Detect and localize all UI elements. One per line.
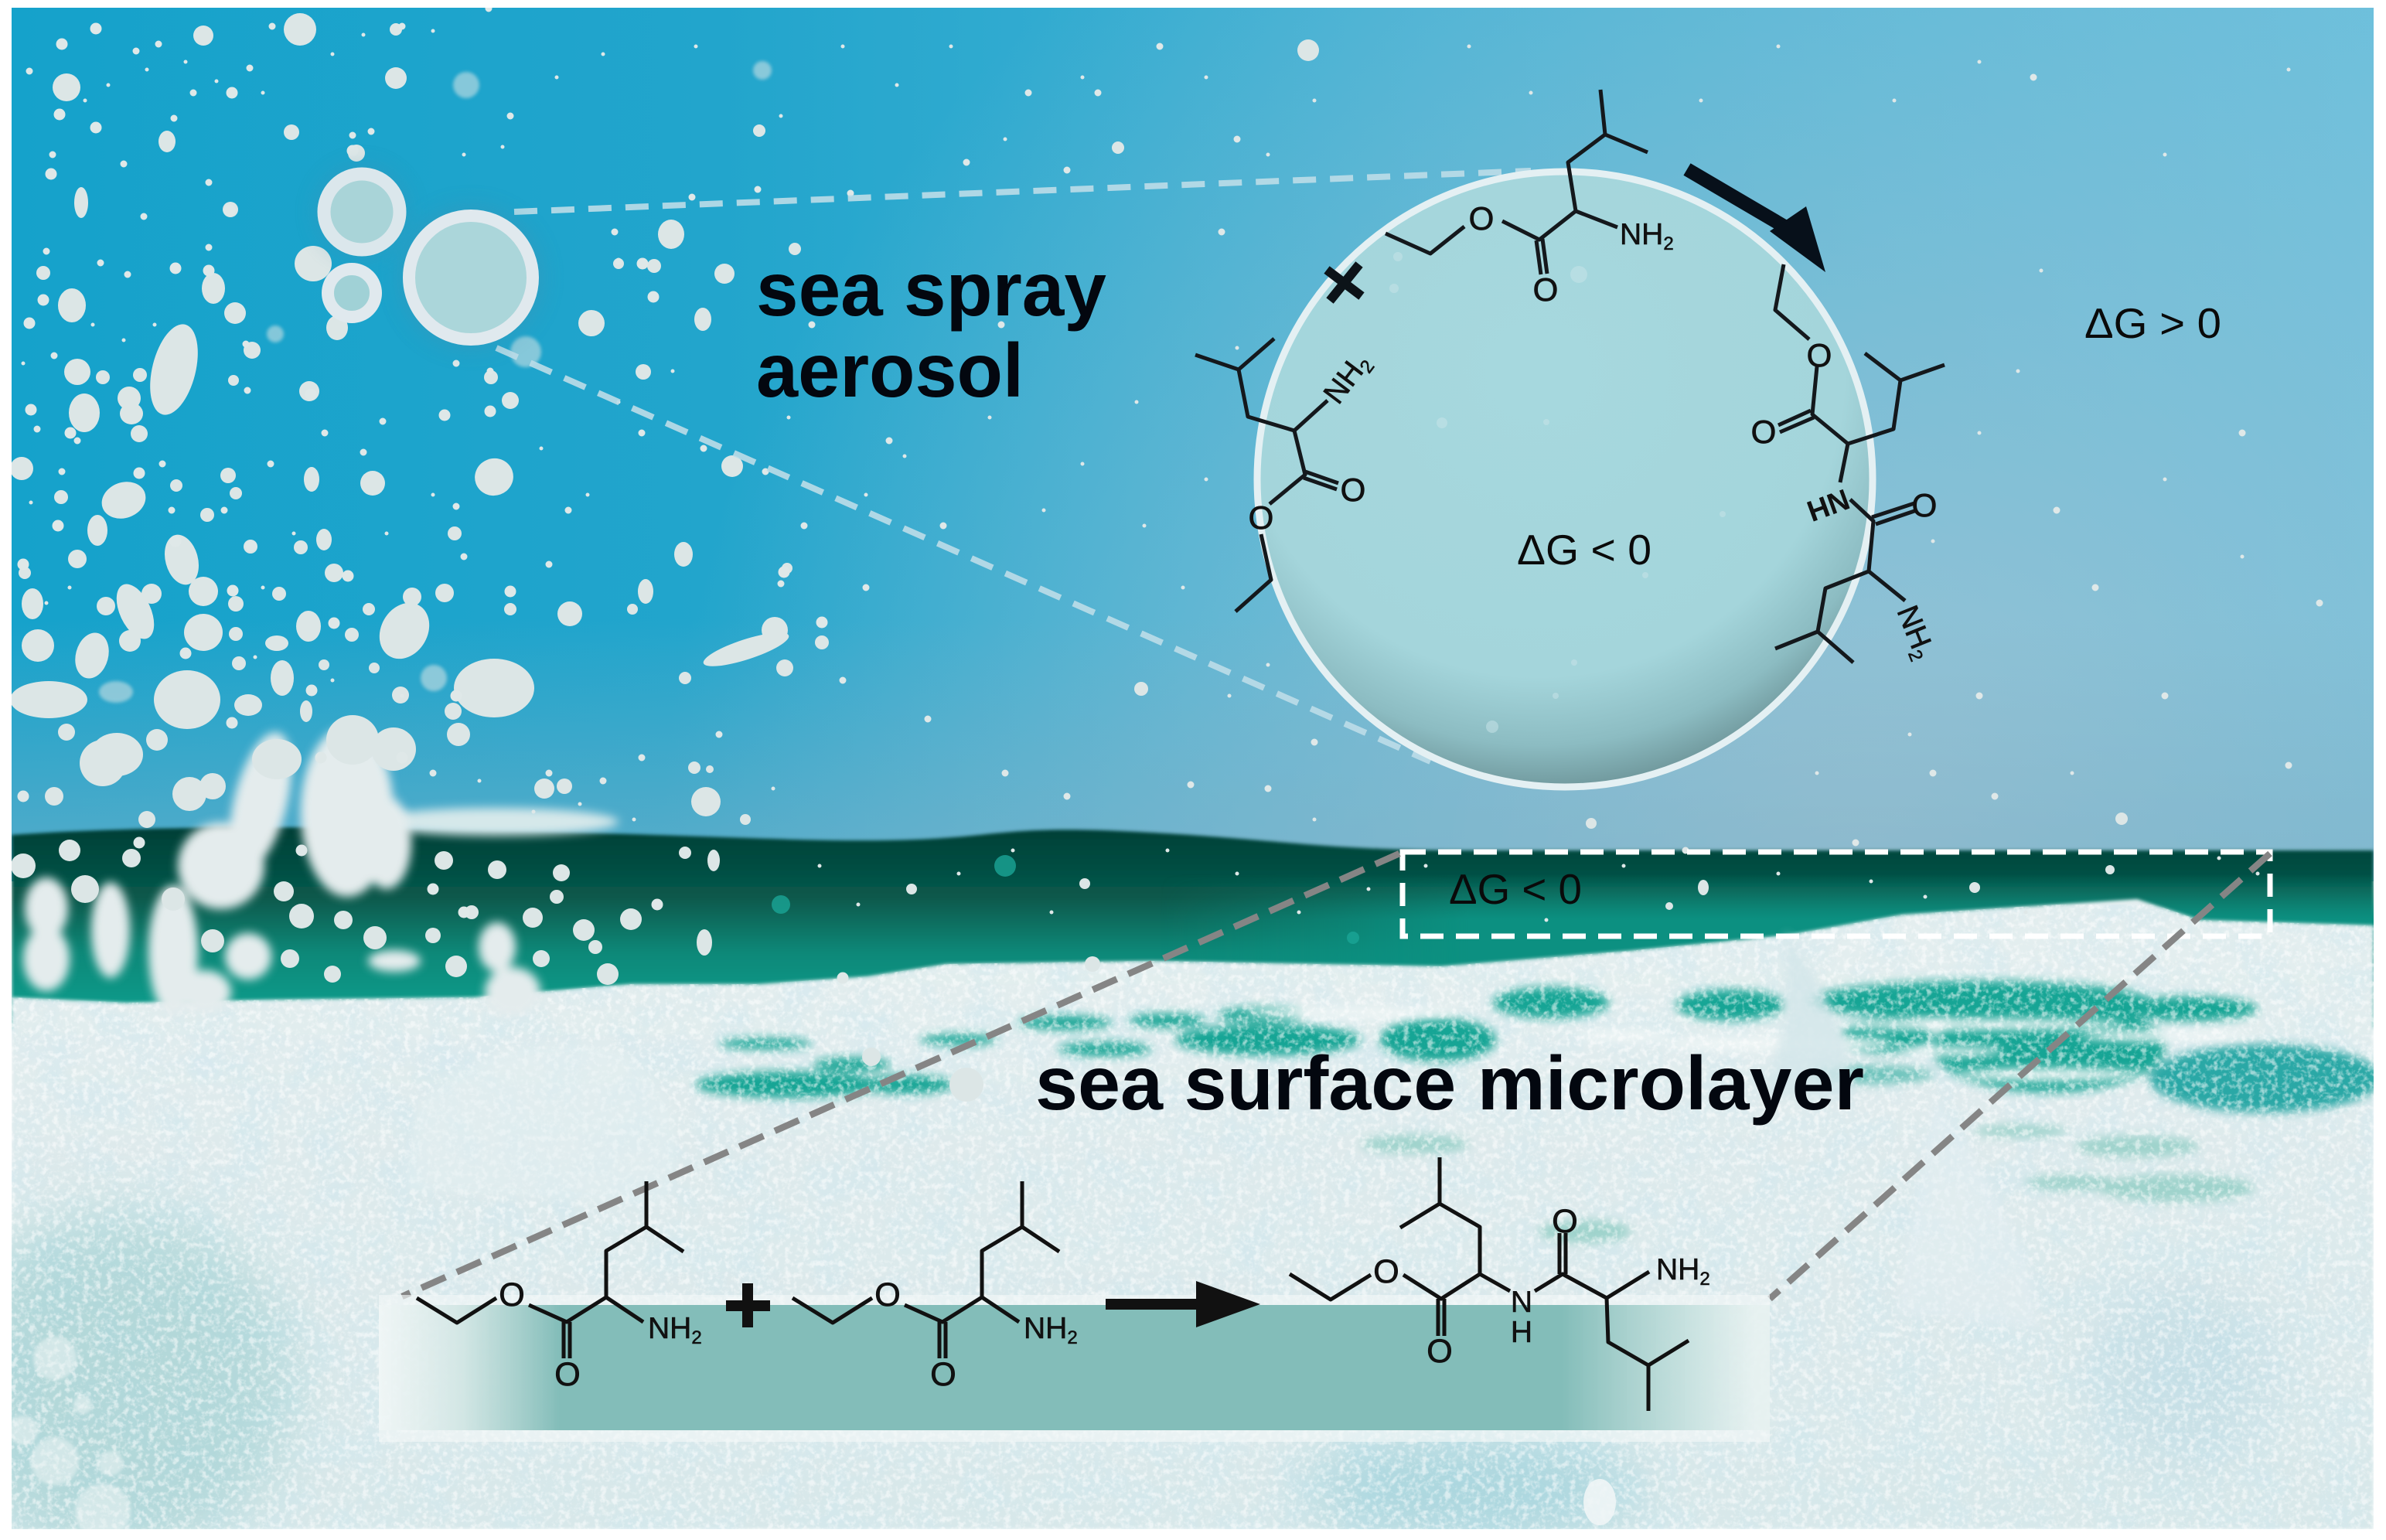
reactant 1: 2 [691,1327,702,1348]
droplet small top [324,174,400,250]
small spray droplets [23,9,2320,978]
faint droplets over enlarged circle [1389,252,1726,733]
enlarged aerosol droplet [1257,172,1873,787]
plus sign [726,1283,770,1327]
product dipeptide: H [1511,1316,1532,1349]
molecule: right dipeptide: O [1807,337,1832,373]
molecule: left leucine ester: O [1341,472,1365,508]
droplet large [409,216,533,339]
product dipeptide [1290,1157,1710,1411]
sky [12,8,2374,881]
molecule: top leucine ester: O [1469,200,1494,237]
zoom indicator: aerosol to droplet [496,171,1531,761]
molecule: top leucine ester [1386,90,1674,308]
heading: sea surface microlayer: sea surface microlayer [1035,1041,1864,1126]
reactant 2: O [930,1356,956,1393]
heading: sea spray aerosol: aerosol [756,328,1024,413]
molecule: right dipeptide: O [1751,414,1776,450]
panel: microlayer reaction [379,1157,1770,1442]
heading: sea spray aerosol: sea spray [756,247,1106,332]
reactant 1: O [499,1276,525,1313]
foam streak on far wave [371,808,619,836]
product dipeptide: 2 [1699,1269,1710,1290]
molecule: right dipeptide [1751,264,1945,664]
product dipeptide: N [1511,1286,1532,1319]
zoom lines from microlayer box [402,853,2270,1299]
zoom indicator: microlayer box [1403,852,2270,936]
teal droplets in water [772,855,1359,944]
reaction arrow on droplet [1687,169,1825,272]
label NH2 rotated: NH [1317,356,1370,410]
reactant 2: O [874,1276,901,1313]
plus sign rotated [1327,264,1362,301]
label NH2 rotated: NH [1890,601,1938,654]
product dipeptide: O [1426,1333,1453,1370]
wave crests [1767,929,1857,1099]
reaction arrow [1106,1281,1260,1327]
label: delta G outside droplet: ΔG > 0 [2084,299,2221,347]
product dipeptide: O [1552,1203,1578,1240]
molecule: top leucine ester: O [1533,271,1558,308]
label NH2: NH [1620,218,1663,251]
reactant 1: NH [648,1312,691,1345]
aerosol droplets [315,165,542,349]
molecule: right dipeptide: O [1912,487,1937,523]
label NH2 rotated: 2 [1904,647,1927,664]
molecule: left leucine ester: O [1249,499,1273,536]
foreground foam [0,899,2381,1540]
reactant 1 [417,1181,702,1393]
molecule: left leucine ester [1195,339,1379,612]
product dipeptide: O [1373,1253,1399,1290]
label: delta G inside droplet: ΔG < 0 [1517,526,1651,574]
label NH2 rotated: 2 [1356,356,1379,377]
droplet tiny [328,269,376,317]
reactant 2: NH [1024,1312,1067,1345]
label NH2: 2 [1663,233,1674,254]
reactant 1: O [554,1356,581,1393]
label NH rotated: NH [1802,482,1853,527]
dark water band [12,827,2386,1028]
product dipeptide: NH [1656,1253,1699,1286]
label: delta G in microlayer box: ΔG < 0 [1449,865,1582,913]
reactant 2: 2 [1067,1327,1078,1348]
reactant 2 [792,1181,1078,1393]
